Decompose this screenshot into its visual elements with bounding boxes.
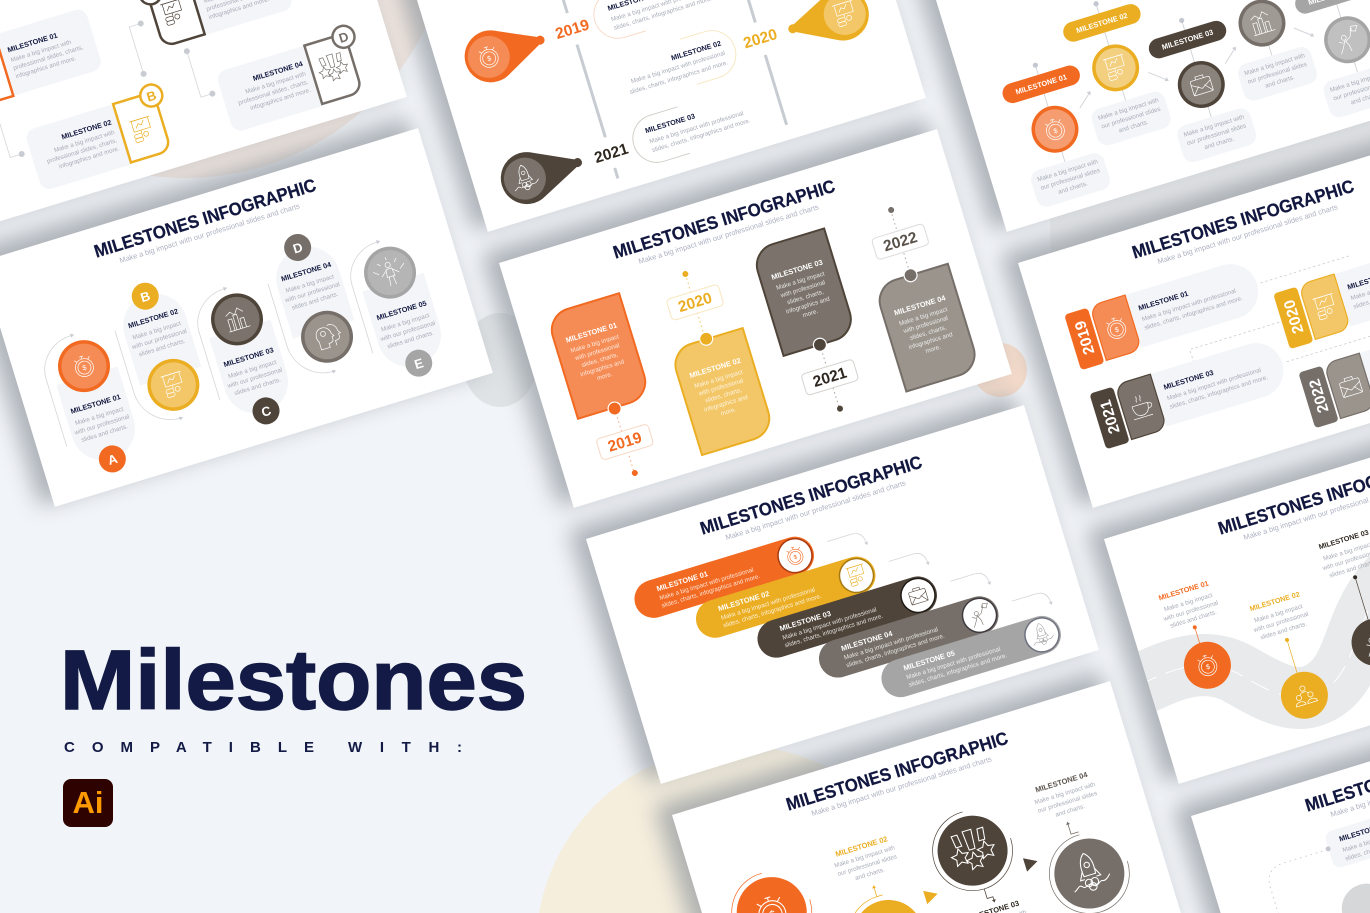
card 2020: more. xyxy=(720,406,737,418)
milestone 02 text: and charts. xyxy=(854,866,886,882)
milestone 04 text xyxy=(1030,769,1102,823)
card 2022: more. xyxy=(925,344,942,355)
milestone E column: with our professional xyxy=(379,320,436,343)
heading: Milestones: Milestones xyxy=(60,633,527,727)
pill milestone 03: MILESTONE 03 xyxy=(778,609,832,633)
pill milestone 01: Make a big impact with professional xyxy=(659,567,754,602)
milestone 04 card: MILESTONE 04 xyxy=(252,59,304,83)
title: MILESTONES INFOGRAPHIC xyxy=(698,452,924,539)
pill milestone 02: Make a big impact with professional xyxy=(720,586,816,622)
milestone 02 card: infographics and more. xyxy=(58,145,121,170)
card 2022: slides, charts, xyxy=(909,324,948,342)
milestone 01 card: professional slides, charts, xyxy=(12,44,84,72)
card 2019: slides, charts, xyxy=(581,351,619,369)
2019 milestone: Make a big impact with professional xyxy=(1141,288,1237,323)
pill milestone 05 xyxy=(877,611,1066,702)
milestone 04 text: MILESTONE 04 xyxy=(1034,770,1089,794)
milestone 02 card: professional slides, charts, xyxy=(46,137,118,165)
card 2019: MILESTONE 01 xyxy=(565,320,618,345)
card 2020: MILESTONE 02 xyxy=(688,356,742,380)
pill milestone 05: slides, charts, infographics and more. xyxy=(908,652,1008,689)
milestone 04 card: Make a big impact with xyxy=(244,70,307,96)
milestone D column: with our professional xyxy=(283,281,341,305)
slide: ringed circles (bottom centre) xyxy=(672,681,1185,913)
slide: circles and pills (top right) xyxy=(932,0,1370,232)
milestone E column: slides and charts. xyxy=(387,330,435,350)
card 2021: with professional xyxy=(779,279,826,300)
milestone A column xyxy=(46,332,147,481)
2021 milestone: Make a big impact with professional xyxy=(1166,367,1262,402)
2020 milestone xyxy=(1273,236,1370,349)
pill milestone 04: slides, charts, infographics and more. xyxy=(845,632,946,669)
milestone 03 capsule xyxy=(627,88,755,168)
pill milestone 04: MILESTONE 04 xyxy=(840,629,894,653)
milestone 02 node: MILESTONE 02 xyxy=(1075,11,1129,35)
milestone D column: D xyxy=(291,239,304,257)
pill milestone 02: MILESTONE 02 xyxy=(717,589,770,613)
milestone C column xyxy=(199,285,300,433)
card 2021: more. xyxy=(802,308,819,319)
milestone 03 stop xyxy=(1314,527,1370,673)
milestone E column: Make a big impact xyxy=(380,312,431,333)
2021 milestone: 2021 xyxy=(1097,397,1124,436)
arrow yellow xyxy=(923,887,940,904)
title: MILESTONES INFOGRAPHIC xyxy=(784,728,1010,815)
pill milestone 02: slides, charts, infographics and more. xyxy=(722,593,823,629)
pill milestone 01: $ xyxy=(793,554,799,561)
milestone C column: MILESTONE 03 xyxy=(222,345,275,369)
milestone 01 card: MILESTONE 01 xyxy=(6,31,59,54)
road xyxy=(1138,556,1370,729)
pill milestone 04: Make a big impact with professional xyxy=(843,626,939,662)
card 2021: Make a big impact xyxy=(775,270,826,292)
milestone A column: MILESTONE 01 xyxy=(69,392,122,416)
milestone 02 stop xyxy=(1245,589,1337,727)
milestone A column: A xyxy=(106,451,120,468)
card 2022: 2022 xyxy=(881,229,919,255)
milestone 04 text: and charts. xyxy=(1055,803,1086,819)
slide: year tabs with capsules (right) xyxy=(1018,129,1370,508)
card 2021 xyxy=(751,228,877,423)
milestone 05 node xyxy=(1289,0,1370,120)
milestone 04 card: infographics and more. xyxy=(249,87,312,112)
arrow brown xyxy=(1023,854,1040,872)
milestone 01 stop: with our professional xyxy=(1162,600,1219,623)
milestone 04 card: D xyxy=(337,29,350,46)
milestone 02 card: B xyxy=(145,88,158,105)
milestone C column: slides and charts. xyxy=(234,376,282,397)
card 2021: slides, charts, xyxy=(786,288,825,306)
card 2019: 2019 xyxy=(606,429,644,456)
card 2020: with professional xyxy=(697,377,744,398)
2019 milestone xyxy=(1064,257,1266,370)
2020 milestone: 2020 xyxy=(1281,298,1307,336)
text: compatible with xyxy=(64,739,462,756)
card 2019: Make a big impact xyxy=(570,333,620,355)
milestone 03 card xyxy=(137,0,294,50)
milestone D column xyxy=(264,225,364,371)
milestone C column: Make a big impact xyxy=(227,359,278,380)
pill milestone 04 xyxy=(814,575,1056,682)
milestone D column: MILESTONE 04 xyxy=(280,260,332,283)
milestone B column: B xyxy=(139,288,152,305)
milestone 01 node: $ xyxy=(1053,128,1059,136)
milestone 03 capsule: Make a big impact with professional xyxy=(649,110,744,145)
2021 milestone: slides, charts, infographics and more. xyxy=(1169,374,1269,411)
milestone B column: slides and charts. xyxy=(138,338,186,358)
card 2022 xyxy=(853,196,980,392)
card 2021: MILESTONE 03 xyxy=(770,258,824,282)
milestone 01 stop: $ xyxy=(1205,664,1211,672)
milestone D column: slides and charts. xyxy=(291,291,339,312)
slide: teardrop timeline (top centre) xyxy=(413,0,926,232)
milestone 04 text: Make a big impact with xyxy=(1034,781,1097,806)
milestone 01 card: Make a big impact with xyxy=(10,39,73,64)
milestone 03 node: Make a big impact with xyxy=(1183,113,1246,139)
card 2019: more. xyxy=(596,371,614,382)
pill milestone 03: Make a big impact with professional xyxy=(782,606,877,642)
2021 milestone: MILESTONE 03 xyxy=(1162,368,1215,392)
card 2021: infographics and xyxy=(785,295,831,316)
milestone 03 text xyxy=(962,897,1033,913)
milestone A column: slides and charts. xyxy=(81,423,129,444)
milestone 04 node: and charts. xyxy=(1264,74,1296,90)
milestone 01 stop: Make a big impact xyxy=(1163,592,1214,613)
slide: dotted path (bottom right) xyxy=(1191,682,1370,913)
milestone 04 node xyxy=(1204,0,1321,104)
milestone 01 card: infographics and more. xyxy=(15,55,77,80)
milestone E column: E xyxy=(413,355,426,372)
milestone 02 node: and charts. xyxy=(1118,119,1150,134)
marker 2019: $ xyxy=(487,55,492,63)
title: MILESTONES INFOGRAPHIC xyxy=(92,175,318,262)
milestone C column: with our professional xyxy=(226,367,283,390)
milestone 03 node: MILESTONE 03 xyxy=(1161,27,1214,52)
milestone 01 node: Make a big impact with xyxy=(1037,158,1099,183)
milestone A column: Make a big impact xyxy=(74,406,125,427)
2019 milestone: $ xyxy=(1114,327,1120,334)
milestone 02 stop: slides and charts. xyxy=(1260,620,1308,641)
card 2020: Make a big impact xyxy=(694,369,744,390)
milestone 01 node: and charts. xyxy=(1057,180,1089,196)
slide: winding road xyxy=(1104,458,1370,784)
milestone 04 card xyxy=(213,23,372,133)
milestone E column xyxy=(352,238,452,386)
milestone 02 text: Make a big impact with xyxy=(834,844,896,870)
milestone 02 text: MILESTONE 02 xyxy=(834,834,889,859)
milestone 02 text xyxy=(830,833,902,887)
milestone 02 stop: MILESTONE 02 xyxy=(1249,589,1301,613)
milestone 02 stop: Make a big impact xyxy=(1253,603,1304,624)
card 2019 xyxy=(546,293,672,487)
marker 2020: 2020 xyxy=(741,26,779,52)
subtitle: Make a big impact with our professional slides and charts xyxy=(810,754,993,818)
marker 2021: 2021 xyxy=(592,140,631,167)
milestone 01 circle xyxy=(1336,877,1370,913)
milestone 03 capsule: MILESTONE 03 xyxy=(644,111,696,135)
milestone 01 label xyxy=(1260,799,1370,913)
milestone C column: C xyxy=(259,403,273,420)
text: compatible with: COMPATIBLE xyxy=(64,739,314,756)
milestone 01 capsule xyxy=(588,0,716,44)
milestone 03 node: our professional slides xyxy=(1186,122,1247,147)
milestone 02 capsule: MILESTONE 02 xyxy=(670,39,722,62)
milestone A column: with our professional xyxy=(73,413,130,437)
card 2019: with professional xyxy=(573,342,620,363)
pill milestone 01: MILESTONE 01 xyxy=(655,569,709,593)
milestone 04 node: our professional slides xyxy=(1247,61,1308,86)
pill milestone 05: Make a big impact with professional xyxy=(906,646,1001,681)
milestone B column xyxy=(112,274,212,419)
slide: staggered pills xyxy=(586,405,1099,784)
card 2021: 2021 xyxy=(811,364,849,391)
milestone 01 stop xyxy=(1155,578,1241,696)
milestone 01 card xyxy=(0,7,103,108)
slide: lettered columns A–E xyxy=(0,128,493,507)
subtitle: Make a big impact with our professional slides and charts xyxy=(1156,202,1339,266)
marker 2021 xyxy=(494,122,635,211)
milestone 02 capsule: Make a big impact with professional xyxy=(630,50,726,85)
milestone 02 circle xyxy=(835,874,938,913)
2021 milestone xyxy=(1089,336,1291,449)
milestone 02 capsule xyxy=(619,25,742,104)
card 2020 xyxy=(649,260,775,455)
milestone E column: MILESTONE 05 xyxy=(375,298,428,322)
milestone 01 stop: MILESTONE 01 xyxy=(1157,579,1210,602)
milestone 02 card xyxy=(22,82,179,192)
slide: lettered milestone cards (top left) xyxy=(0,0,407,231)
pill milestone 01 xyxy=(630,516,871,623)
milestone 02 node: our professional slides xyxy=(1101,106,1161,130)
milestone 02 capsule: slides, charts, infographics and more. xyxy=(629,59,729,96)
title: MILESTONES INFOGRAPHIC xyxy=(1130,176,1356,263)
milestone 02 card: Make a big impact with xyxy=(53,129,116,154)
milestone 04 node: Make a big impact with xyxy=(1244,52,1306,77)
milestone B column: Make a big impact xyxy=(132,320,182,341)
subtitle: Make a big impact with our professional slides and charts xyxy=(637,202,820,266)
milestone 03 node xyxy=(1143,6,1261,165)
milestone 04 text: our professional slides xyxy=(1037,790,1098,815)
milestone 03 capsule: slides, charts, infographics and more. xyxy=(651,117,752,154)
milestone B column: MILESTONE 02 xyxy=(127,306,179,330)
milestone 03 node: and charts. xyxy=(1204,135,1235,151)
card 2022: MILESTONE 04 xyxy=(893,293,947,317)
pill milestone 05: MILESTONE 05 xyxy=(902,648,956,673)
milestone 02 node xyxy=(1057,0,1175,148)
card 2020: slides, charts, xyxy=(704,387,743,405)
milestone D column: Make a big impact xyxy=(285,273,335,295)
title: MILESTONES INFOGRAPHIC xyxy=(611,176,837,263)
icon: Adobe Illustrator xyxy=(63,779,113,827)
milestone 01 node xyxy=(996,51,1114,210)
2019 milestone: MILESTONE 01 xyxy=(1137,289,1189,313)
2019 milestone: 2019 xyxy=(1072,318,1098,357)
milestone 03 stop: MILESTONE 03 xyxy=(1318,528,1370,551)
2022 milestone: 2022 xyxy=(1306,377,1333,415)
2022 milestone xyxy=(1298,315,1370,428)
card 2019: infographics and xyxy=(580,358,626,378)
card 2022: infographics and xyxy=(908,331,954,351)
pill milestone 03 xyxy=(753,556,994,662)
milestone 02 card: MILESTONE 02 xyxy=(60,118,113,141)
card 2020: infographics and xyxy=(703,394,749,414)
card 2020: 2020 xyxy=(676,290,714,316)
milestone B column: with our professional xyxy=(130,328,188,351)
2019 milestone: slides, charts, infographics and more. xyxy=(1144,295,1244,332)
milestone 01 node: our professional slides xyxy=(1040,167,1101,192)
milestone 04 circle xyxy=(1035,808,1139,913)
milestone 01 node: MILESTONE 01 xyxy=(1014,72,1068,96)
milestone 02 node: Make a big impact with xyxy=(1097,97,1160,122)
pill milestone 02 xyxy=(691,536,933,643)
milestone 01 circle xyxy=(722,862,822,913)
milestone 02 text: our professional slides xyxy=(837,853,898,878)
marker 2020 xyxy=(736,0,875,70)
marker 2019: 2019 xyxy=(553,16,592,43)
pill milestone 03: slides, charts, infographics and more. xyxy=(784,613,884,649)
subtitle: Make a big impact with our professional slides and charts xyxy=(724,478,907,542)
milestone 04 card: professional slides, charts, xyxy=(237,79,309,107)
card 2022: Make a big impact xyxy=(898,306,949,327)
subtitle: Make a big impact with our professional slides and charts xyxy=(118,201,301,265)
card 2022: with professional xyxy=(902,315,949,335)
milestone 01 stop: slides and charts. xyxy=(1169,609,1218,630)
milestone 03 circle xyxy=(923,801,1027,913)
slide: year cards timeline (centre) xyxy=(499,129,1012,508)
milestone A column: $ xyxy=(82,365,88,372)
pill milestone 01: slides, charts, infographics and more. xyxy=(661,573,761,610)
milestone 02 stop: with our professional xyxy=(1252,611,1309,634)
icon: Adobe Illustrator: Ai xyxy=(72,785,104,820)
text: compatible with: WITH: xyxy=(348,739,462,756)
marker 2019 xyxy=(458,1,597,89)
